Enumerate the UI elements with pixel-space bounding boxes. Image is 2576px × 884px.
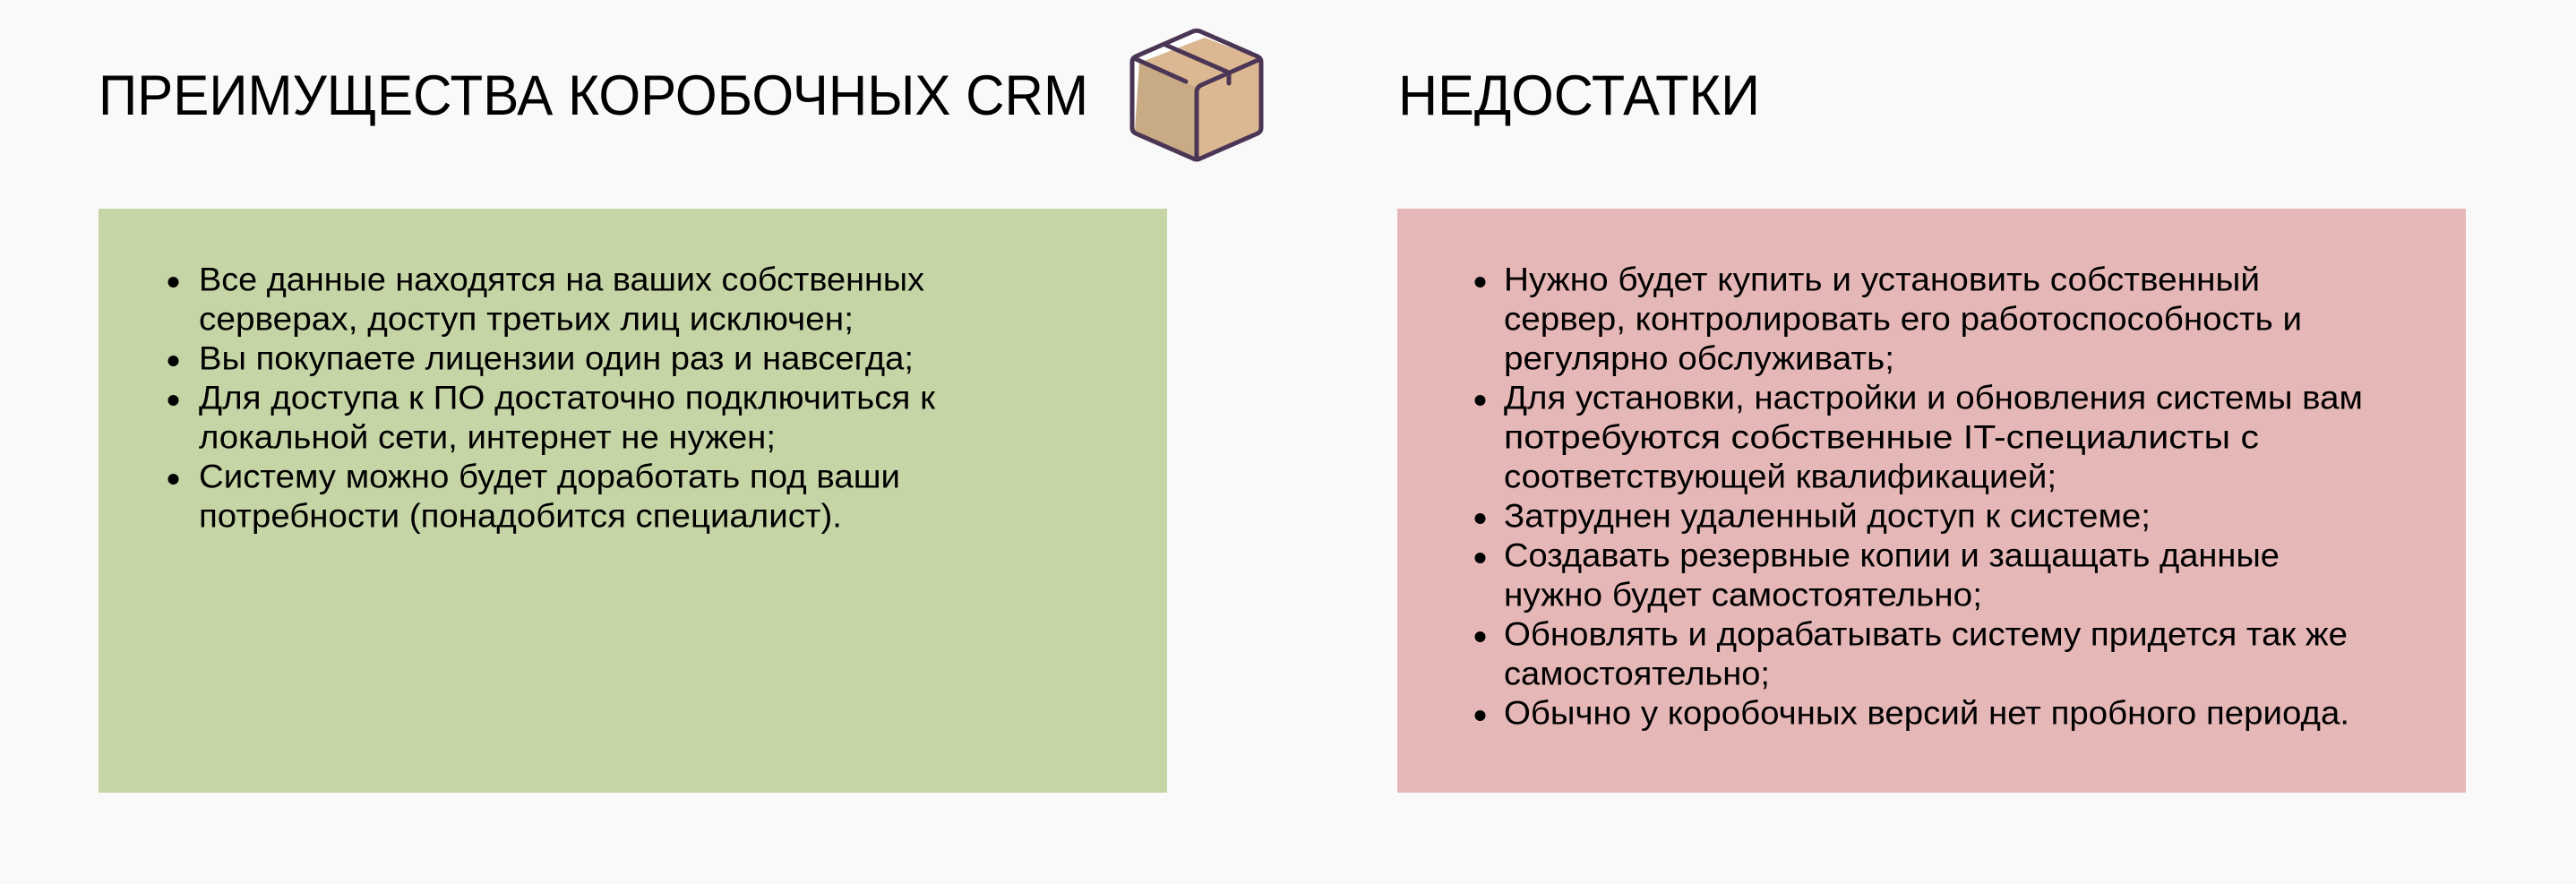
heading: advantages: ПРЕИМУЩЕСТВА КОРОБОЧНЫХ CRM: [99, 64, 1088, 127]
bullet list: disadvantages: Затруднен удаленный доступ к системе;: [1504, 496, 2151, 534]
bullet list: disadvantages: соответствующей квалификацией;: [1504, 457, 2057, 494]
bullet list: disadvantages: нужно будет самостоятельно;: [1504, 575, 1982, 613]
bullet list: disadvantages: потребуются собственные IT-специалисты с: [1504, 417, 2259, 455]
bullet list: disadvantages: самостоятельно;: [1504, 654, 1770, 691]
bullet list: advantages: серверах, доступ третьих лиц исключен;: [199, 299, 854, 337]
bullet list: advantages: Все данные находятся на ваших собственных: [199, 260, 924, 297]
panel: advantages: [99, 209, 1167, 793]
bullet list: disadvantages: Создавать резервные копии и защащать данные: [1504, 536, 2280, 573]
panel background: green: [99, 209, 1167, 793]
bullet list: disadvantages: регулярно обслуживать;: [1504, 339, 1894, 376]
bullet list: disadvantages: Для установки, настройки и обновления системы вам: [1504, 378, 2363, 416]
heading: disadvantages: НЕДОСТАТКИ: [1398, 64, 1760, 127]
bullet list: advantages: Вы покупаете лицензии один раз и навсегда;: [199, 339, 914, 376]
bullet list: disadvantages: Нужно будет купить и установить собственный: [1504, 260, 2260, 297]
panel: disadvantages: [1397, 209, 2466, 793]
icon: cardboard box: [1131, 30, 1261, 160]
bullet list: advantages: [168, 260, 936, 534]
bullet list: advantages: Систему можно будет доработать под ваши: [199, 457, 900, 494]
bullet list: disadvantages: Обычно у коробочных версий нет пробного периода.: [1504, 693, 2349, 731]
panel background: pink: [1397, 209, 2466, 793]
bullet list: disadvantages: [1474, 260, 2363, 731]
bullet list: advantages: локальной сети, интернет не нужен;: [199, 417, 776, 455]
bullet list: disadvantages: Обновлять и дорабатывать систему придется так же: [1504, 614, 2348, 652]
bullet list: advantages: Для доступа к ПО достаточно подключиться к: [199, 378, 936, 416]
bullet list: advantages: потребности (понадобится специалист).: [199, 496, 842, 534]
bullet list: disadvantages: сервер, контролировать его работоспособность и: [1504, 299, 2302, 337]
